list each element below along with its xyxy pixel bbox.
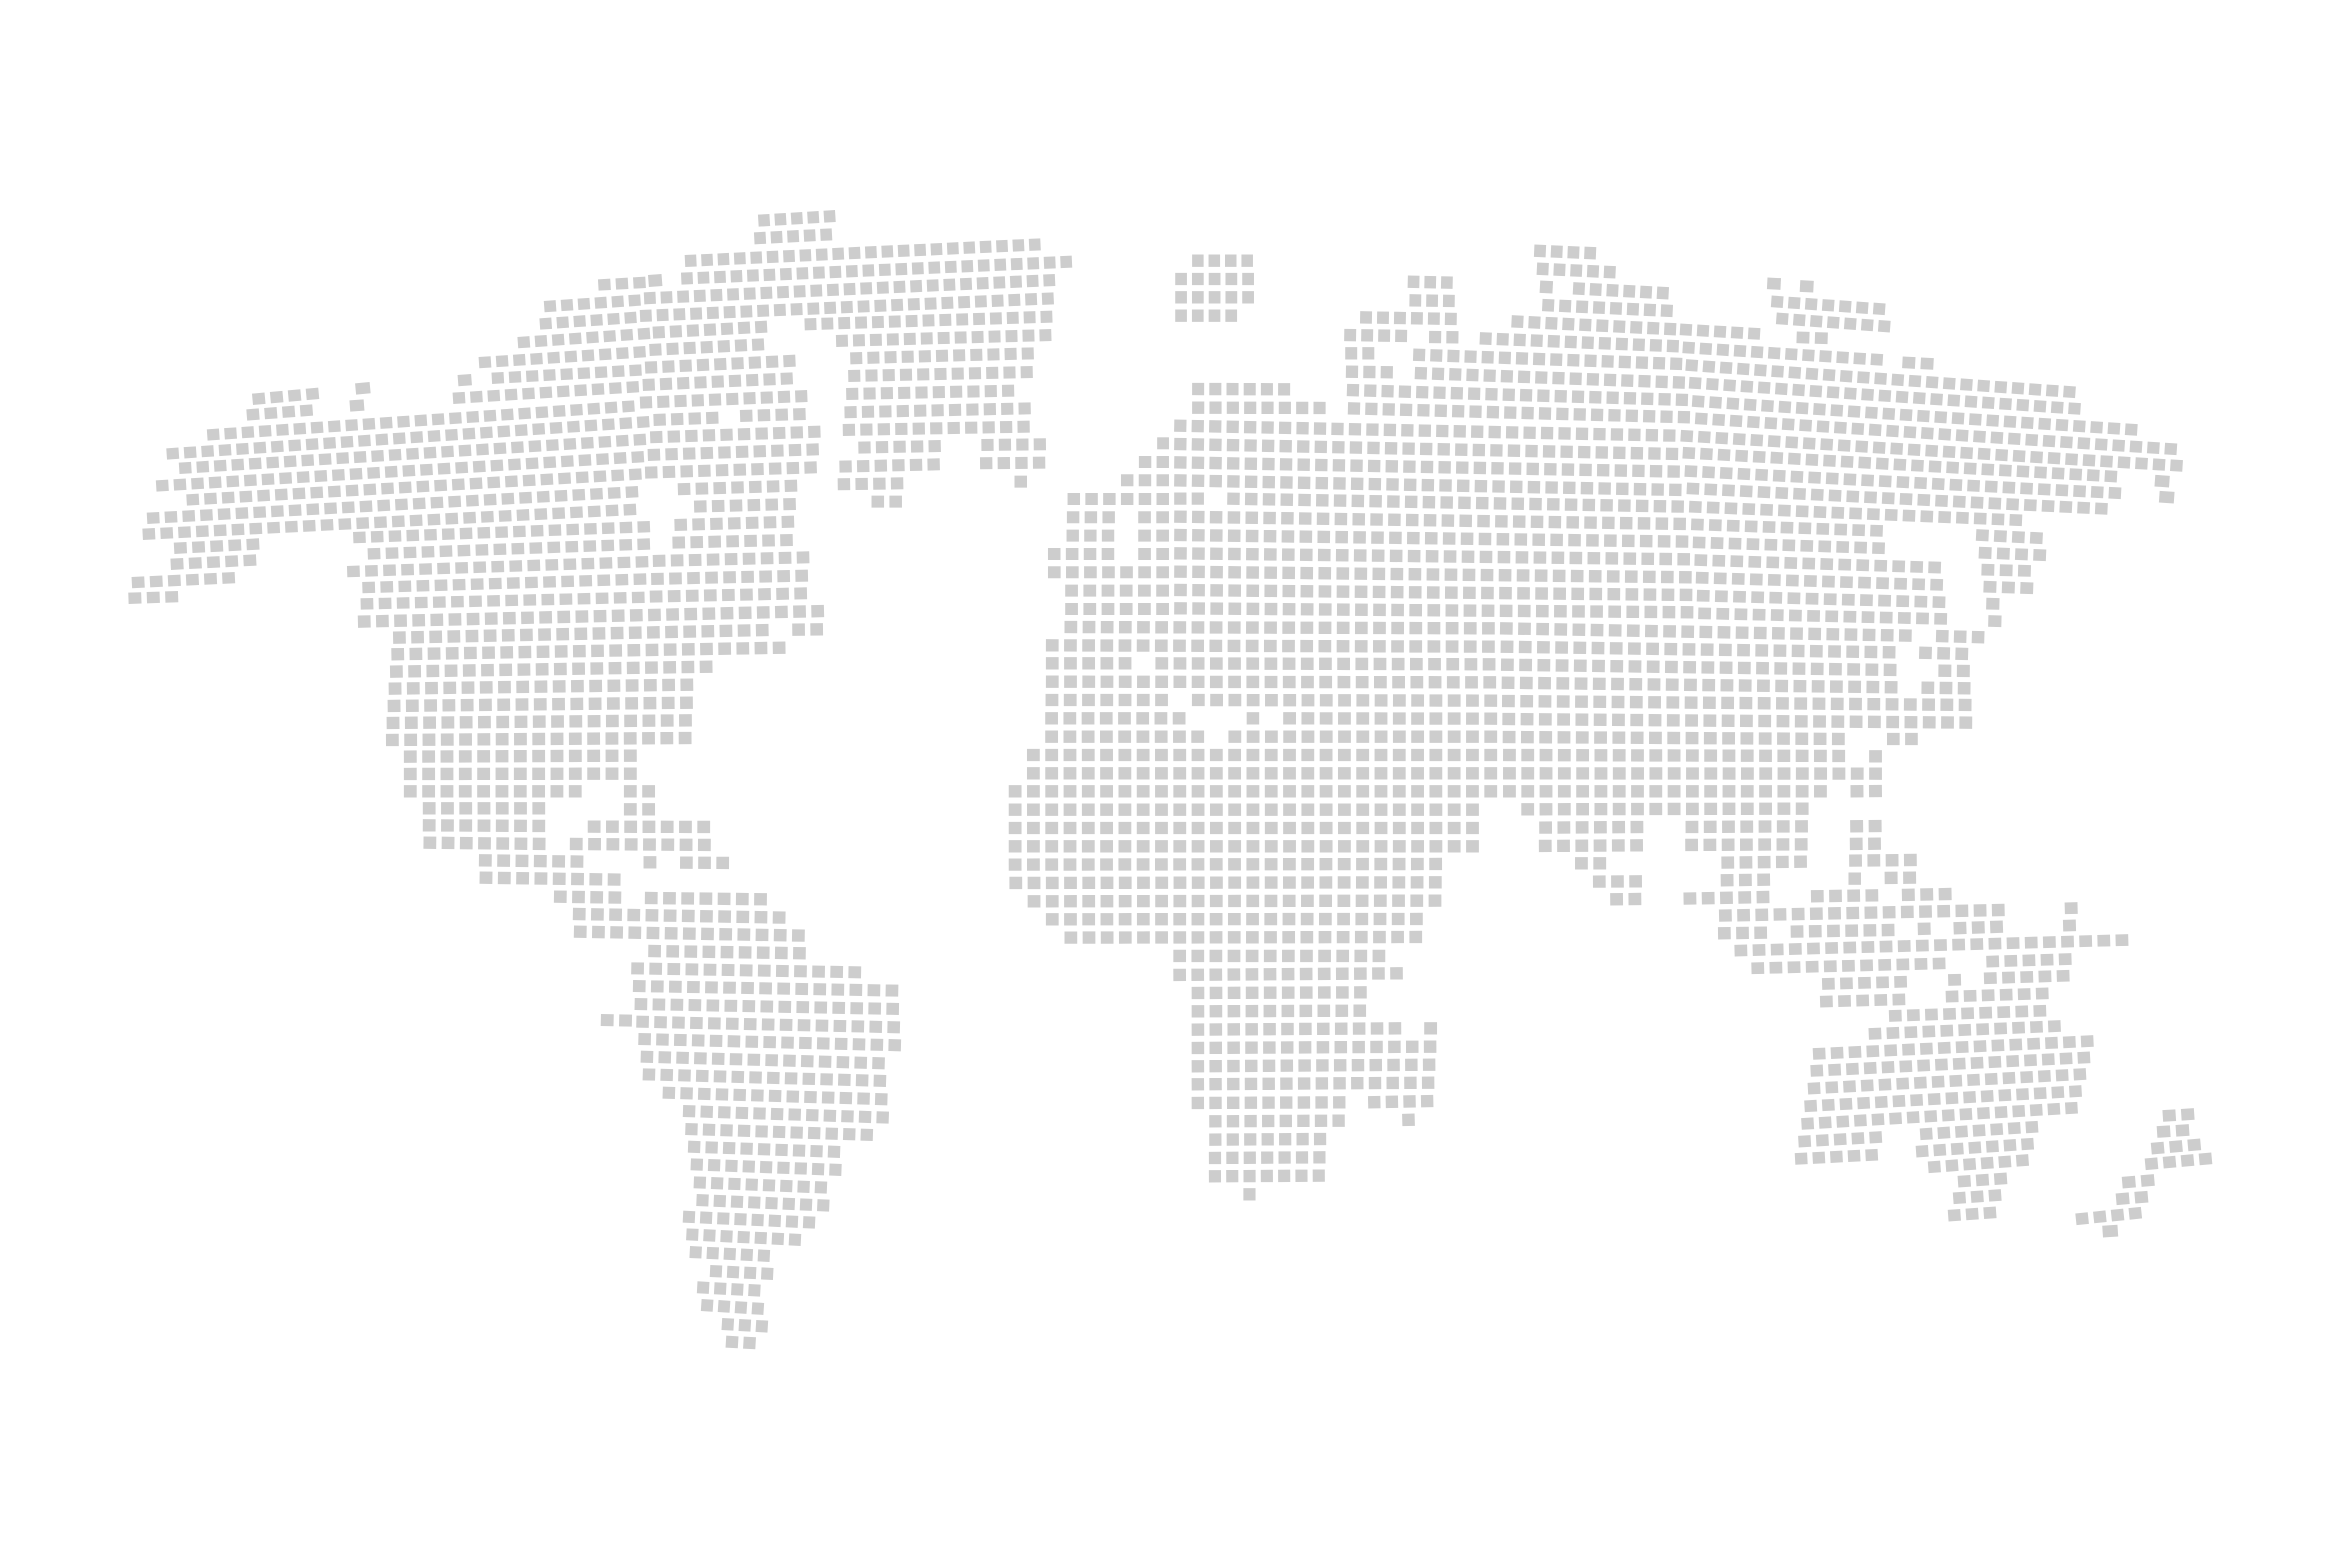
map section: Central America and northern South America [358, 611, 824, 953]
map section: Alaska and western North America [128, 282, 650, 604]
map section: eastern North America and Greenland [640, 216, 1169, 609]
map section: southern Africa and Madagascar [1192, 992, 1437, 1194]
map section: Africa, Middle East and central Asia [1009, 627, 1497, 975]
map section: Iceland, Scandinavia and northern Russia [1174, 251, 1693, 612]
map section: eastern Russia and Kamchatka [1680, 283, 2183, 621]
map section: Indonesia and Australia [1735, 908, 2212, 1232]
map section: west European coast column [1048, 443, 1169, 609]
map section: New Zealand [2076, 1114, 2212, 1232]
map section: south Asia, Southeast Asia and Japan [1500, 628, 2005, 933]
map section: South America [601, 968, 901, 1343]
